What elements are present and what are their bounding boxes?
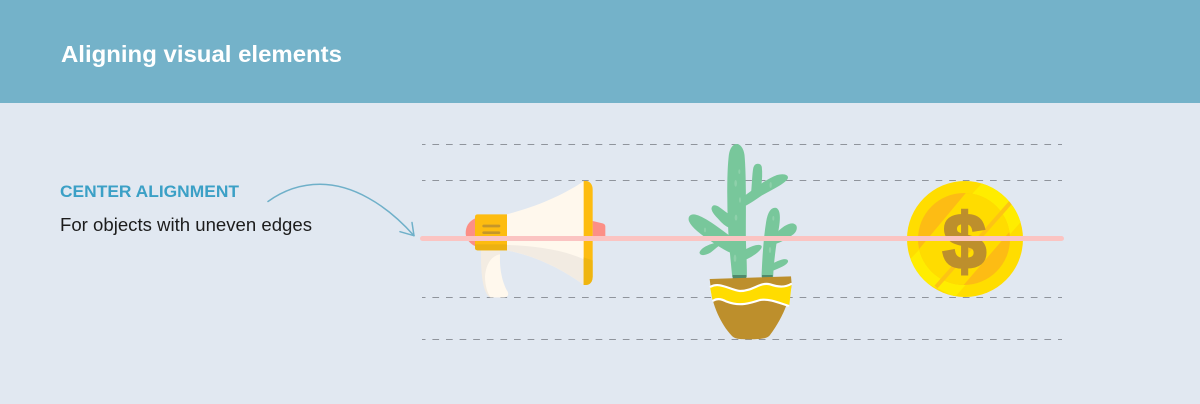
icon: gold coin [907, 181, 1023, 297]
coin inner disc [918, 193, 1010, 285]
megaphone body [475, 214, 507, 250]
body text: For objects with uneven edges [60, 215, 312, 235]
coin outer disc [907, 181, 1023, 297]
dollar sign: $ [943, 197, 986, 285]
cactus base shadow [733, 275, 773, 279]
center alignment guide line [420, 236, 1064, 241]
megaphone front flare [593, 221, 605, 238]
arrow [268, 184, 414, 236]
megaphone rim [584, 181, 593, 285]
cactus stems [689, 144, 796, 277]
megaphone handle [481, 250, 508, 297]
megaphone rear cap [466, 218, 475, 246]
pot white waves [711, 284, 791, 306]
cactus spines [704, 169, 774, 262]
icon: potted cactus [689, 144, 796, 339]
coin thin stripe [936, 202, 1011, 287]
coin light diagonal band [910, 184, 1020, 296]
title: Aligning visual elements [61, 41, 342, 67]
pot yellow band [710, 284, 792, 305]
header band [0, 0, 1200, 103]
plant pot [710, 276, 792, 339]
subheading: center alignment: CENTER ALIGNMENT [60, 183, 239, 201]
coin inner sheen band [919, 193, 1010, 285]
icon: megaphone [466, 181, 605, 297]
megaphone horn [507, 181, 584, 285]
